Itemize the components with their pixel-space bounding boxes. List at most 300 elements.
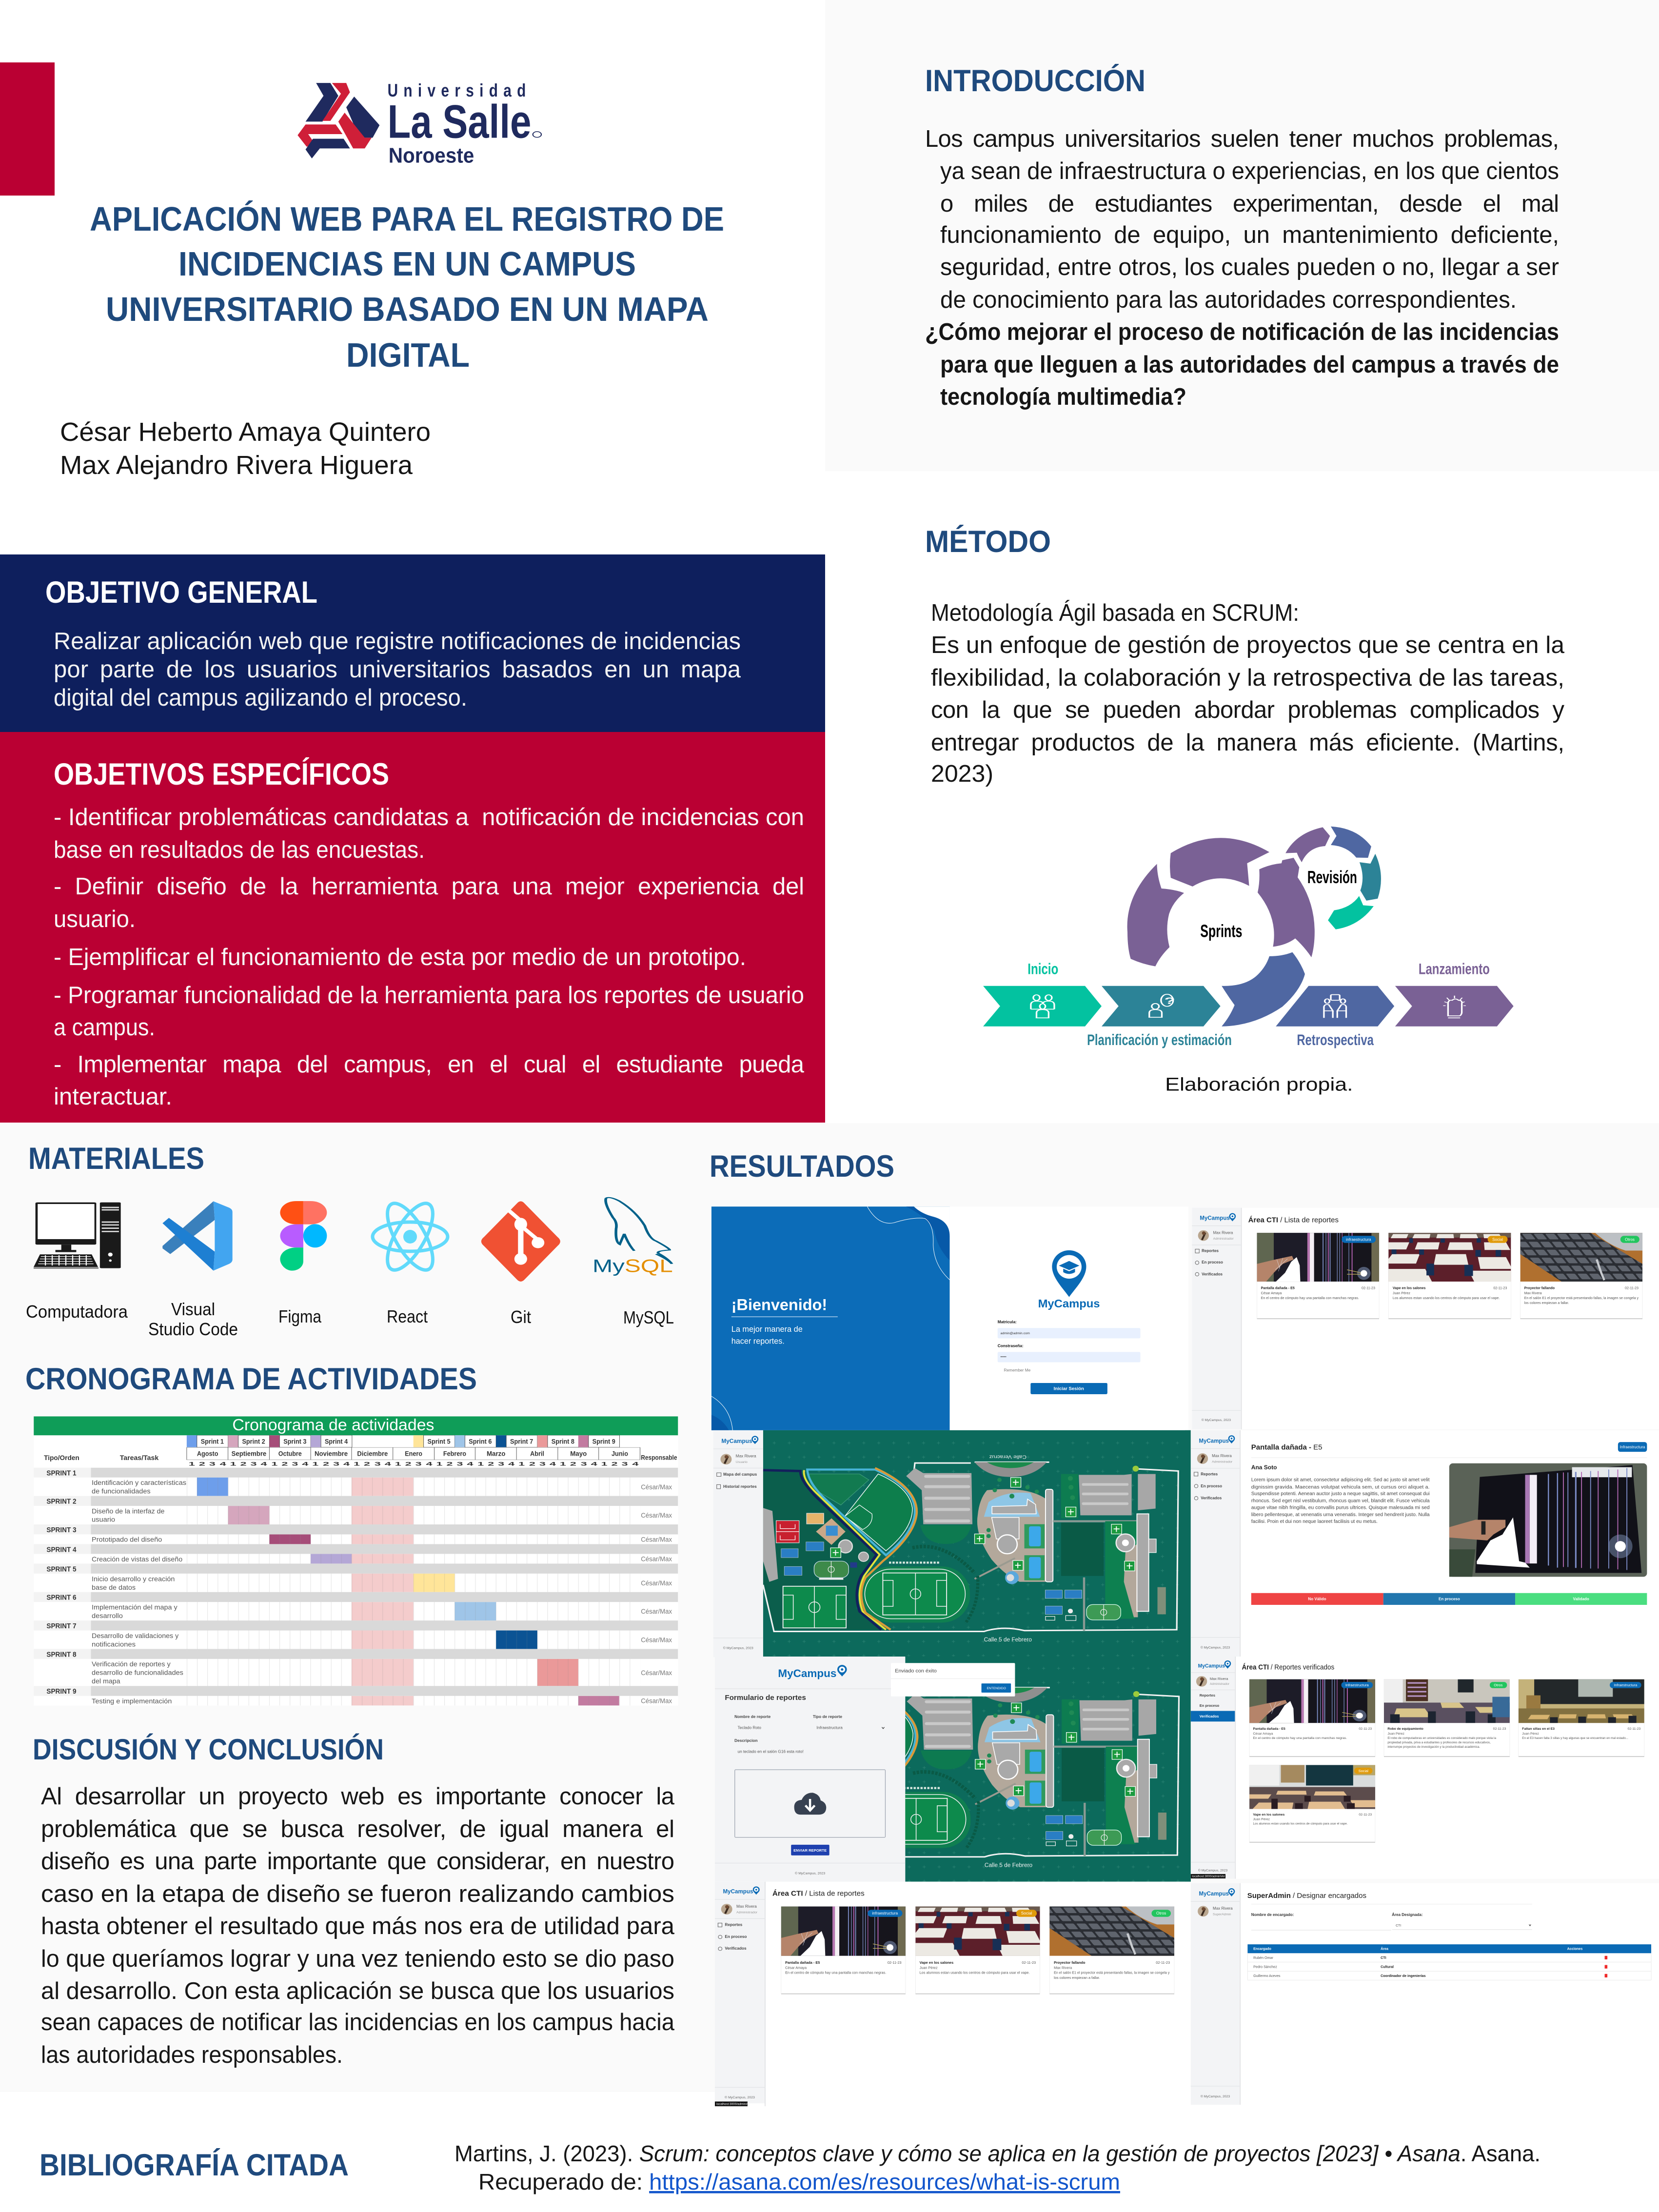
diagram: SCRUM process: Lanzamiento bbox=[1419, 960, 1490, 977]
text: introduccion: funcionamiento de equipo, un mantenimiento deficiente, bbox=[940, 222, 1559, 248]
screenshot: login: Matricula: bbox=[998, 1320, 1017, 1324]
card: pantalla dañada verificada: César Amaya bbox=[1253, 1732, 1273, 1736]
gantt sprint rows: SPRINT 6 bbox=[46, 1594, 77, 1601]
text: discusion y conclusion: problemática que se busca resolver, de igual manera el bbox=[41, 1816, 674, 1842]
admin list sidebar bbox=[715, 1882, 766, 2106]
card: robo de equipamiento: El robo de computadoras en universidades es considerado malo porque viola la bbox=[1387, 1737, 1496, 1740]
chart: gantt cronograma de actividades: Identificación y características bbox=[92, 1479, 186, 1487]
chart: gantt cronograma de actividades: desarrollo de funcionalidades bbox=[92, 1669, 183, 1677]
verified sidebar bbox=[1191, 1657, 1236, 1879]
card: proyector: los colores empiezan a fallar. bbox=[1524, 1302, 1569, 1305]
gantt tasks: desarrollo bbox=[92, 1612, 123, 1620]
detail sidebar: Verificados bbox=[1201, 1496, 1222, 1501]
text: introduccion: ¿Cómo mejorar el proceso de notificación de las incidencias bbox=[925, 319, 1559, 345]
labels: materiales: Computadora bbox=[26, 1302, 128, 1322]
screenshot: login: La mejor manera de bbox=[731, 1325, 803, 1334]
diagram: SCRUM process: Inicio bbox=[1027, 960, 1058, 977]
gantt legend: Sprint 5 bbox=[428, 1438, 451, 1445]
gantt column headers: Septiembre bbox=[232, 1450, 266, 1458]
text: objetivos especificos bbox=[54, 804, 805, 1110]
card: faltan sillas bbox=[1519, 1679, 1644, 1757]
text: objetivos especificos: - Ejemplificar el funcionamiento de esta por medio de un prototipo. bbox=[54, 944, 746, 970]
text: discusion y conclusion: Al desarrollar un proyecto web es importante conocer la bbox=[41, 1783, 675, 1810]
card: proyector admin: 02-11-23 bbox=[1156, 1961, 1170, 1965]
chart: gantt cronograma de actividades: César/Max bbox=[641, 1608, 672, 1615]
card: robo de equipamiento: propiedad privada, priva a estudiantes y profesores de recursos educativos, bbox=[1387, 1741, 1491, 1744]
gantt tasks: Inicio desarrollo y creación bbox=[92, 1575, 175, 1583]
chart: gantt cronograma de actividades: César/Max bbox=[641, 1669, 672, 1677]
card: pantalla dañada verificada: Pantalla dañada - E5 bbox=[1253, 1727, 1285, 1731]
heading: objetivos especificos: OBJETIVOS ESPECÍFICOS bbox=[54, 757, 389, 791]
gantt tasks: notificaciones bbox=[92, 1640, 136, 1648]
superadmin sidebar: © MyCampus, 2023 bbox=[1201, 2094, 1230, 2098]
gantt column headers: Febrero bbox=[443, 1450, 466, 1458]
card: pantalla dañada admin: César Amaya bbox=[785, 1966, 807, 1970]
designation form: Nombre de encargado: bbox=[1251, 1913, 1294, 1917]
card: vape admin: Social bbox=[1021, 1911, 1032, 1916]
gantt title bar: Cronograma de actividades bbox=[232, 1416, 434, 1434]
detail description: rhoncus. Sed eget nisl vestibulum, rhoncus quam vel, blandit elit. Fusce vehicula bbox=[1251, 1499, 1430, 1504]
map sidebar bbox=[713, 1430, 763, 1657]
gantt vacation block bbox=[352, 1478, 414, 1705]
text: objetivo general bbox=[54, 628, 741, 711]
gantt legend bbox=[187, 1435, 620, 1447]
report form: Tipo de reporte bbox=[813, 1715, 843, 1719]
verified sidebar: © MyCampus, 2023 bbox=[1198, 1869, 1227, 1872]
card: robo de equipamiento bbox=[1384, 1679, 1510, 1757]
screenshot: login: admin@admin.com bbox=[1000, 1332, 1030, 1335]
authors bbox=[60, 417, 431, 480]
text: metodo: flexibilidad, la colaboración y la retrospectiva de las tareas, bbox=[931, 665, 1564, 691]
card: vape admin: Los alumnos estan usando los centros de cómputo para usar el vape. bbox=[920, 1971, 1030, 1975]
success dialog bbox=[891, 1663, 1015, 1697]
big ring: sprints bbox=[1127, 838, 1315, 1027]
verified sidebar: MyCampus bbox=[1198, 1663, 1225, 1669]
gantt sprint rows: SPRINT 3 bbox=[46, 1526, 77, 1534]
gantt tasks: Desarrollo de validaciones y bbox=[92, 1632, 178, 1640]
map sidebar: Usuario bbox=[736, 1461, 748, 1464]
report form: Formulario de reportes bbox=[725, 1694, 806, 1702]
card: proyector bbox=[1521, 1233, 1642, 1319]
labels: materiales: Figma bbox=[278, 1306, 322, 1326]
detail description: dignissim gravida. Maecenas volutpat vehicula sem, ut cursus orci aliquet a. bbox=[1251, 1484, 1430, 1490]
logo: Universidad La Salle Noroeste: La Salle bbox=[388, 95, 531, 148]
diagram: SCRUM process bbox=[983, 827, 1514, 1095]
gantt legend: Sprint 2 bbox=[242, 1438, 265, 1445]
card: pantalla dañada admin bbox=[781, 1907, 906, 1995]
detail status buttons bbox=[1251, 1593, 1647, 1605]
chart: gantt cronograma de actividades: César/Max bbox=[641, 1580, 672, 1587]
card: pantalla dañada verificada: En el centro de cómputo hay una pantalla con manchas negras. bbox=[1253, 1737, 1347, 1740]
card: proyector admin: Proyector fallando bbox=[1054, 1961, 1086, 1965]
screenshot: verified reports bbox=[1185, 1657, 1659, 1882]
gantt bars bbox=[197, 1478, 619, 1705]
card: pantalla dañada verificada bbox=[1249, 1679, 1375, 1757]
gantt column headers: Abril bbox=[530, 1450, 544, 1458]
map sidebar: © MyCampus, 2023 bbox=[723, 1646, 753, 1650]
gantt column headers bbox=[44, 1447, 677, 1467]
card: faltan sillas: Juan Pérez bbox=[1522, 1732, 1539, 1736]
detail sidebar: © MyCampus, 2023 bbox=[1201, 1646, 1230, 1650]
panel: objetivos especificos bbox=[0, 732, 825, 1123]
text: discusion y conclusion: diseño es una parte importante que considerar, en nuestro bbox=[41, 1848, 674, 1875]
text: metodo bbox=[931, 600, 1565, 787]
card: vape verificado bbox=[1249, 1765, 1375, 1843]
arrow: planificacion bbox=[1102, 986, 1221, 1027]
detail description: facilisi. Proin et dui non neque laoreet facilisis ut eu metus. bbox=[1251, 1519, 1378, 1524]
text: objetivo general: por parte de los usuarios universitarios basados en un mapa bbox=[54, 656, 741, 683]
report form: ENVIAR REPORTE bbox=[793, 1848, 827, 1853]
decorative red tab bbox=[0, 62, 55, 196]
detail sidebar: MyCampus bbox=[1199, 1437, 1229, 1444]
screenshot: superadmin: SuperAdmin / Designar encargados bbox=[1247, 1892, 1366, 1900]
text: objetivo general: digital del campus agilizando el proceso. bbox=[54, 685, 467, 711]
text: discusion y conclusion: sean capaces de notificar las incidencias en los campus hacia bbox=[41, 2009, 675, 2035]
detail description: libero pellentesque, at venenatis urna venenatis. Integer sed hendrerit justo. Nulla bbox=[1251, 1512, 1430, 1518]
gantt column headers: 12341234123412341234123412341234123412341234 bbox=[189, 1461, 639, 1467]
chart: gantt cronograma de actividades: César/Max bbox=[641, 1697, 672, 1704]
card: vape: 02-11-23 bbox=[1493, 1286, 1507, 1290]
card: proyector admin: los colores empiezan a fallar. bbox=[1054, 1976, 1100, 1980]
gantt tasks: Diseño de la interfaz de bbox=[92, 1507, 164, 1515]
gantt legend: Sprint 6 bbox=[469, 1438, 492, 1445]
card: vape: Juan Pérez bbox=[1393, 1292, 1410, 1295]
card: pantalla dañada verificada: Infraestructura bbox=[1345, 1683, 1369, 1687]
gantt sprint rows: SPRINT 5 bbox=[46, 1565, 77, 1573]
map labels bbox=[984, 1454, 1032, 1643]
text: objetivos especificos: usuario. bbox=[54, 906, 136, 932]
report form: un teclado en el salón G16 esta roto! bbox=[738, 1750, 804, 1754]
sidebar: Reportes bbox=[1202, 1249, 1219, 1253]
text: Responsable bbox=[641, 1454, 677, 1461]
detail status buttons: Validado bbox=[1573, 1597, 1589, 1601]
chart: gantt cronograma de actividades: César/Max bbox=[641, 1556, 672, 1562]
designation form: Área Designada: bbox=[1392, 1913, 1423, 1917]
detail sidebar: Reportes bbox=[1201, 1472, 1218, 1477]
gantt tasks: Testing e implementación bbox=[92, 1697, 172, 1705]
admin list sidebar: localhost:3000/admin# bbox=[716, 2103, 748, 2106]
chart: gantt cronograma de actividades: Creación de vistas del diseño bbox=[92, 1555, 182, 1563]
text: objetivos especificos: interactuar. bbox=[54, 1084, 172, 1110]
gantt legend: Sprint 9 bbox=[592, 1438, 615, 1445]
text: objetivos especificos: - Definir diseño de la herramienta para una mejor experiencia del bbox=[54, 873, 804, 900]
heading: objetivo general: OBJETIVO GENERAL bbox=[45, 575, 317, 610]
heading: introduccion: INTRODUCCIÓN bbox=[925, 64, 1146, 98]
text: metodo: entregar productos de la manera más eficiente. (Martins, bbox=[931, 730, 1564, 756]
sidebar: Verificados bbox=[1202, 1272, 1223, 1276]
heading: bibliografia citada: BIBLIOGRAFÍA CITADA bbox=[40, 2148, 349, 2182]
report form: Infraestructura bbox=[817, 1726, 843, 1730]
screenshot: map with success dialog bbox=[715, 1656, 1191, 1882]
sidebar: © MyCampus, 2023 bbox=[1202, 1418, 1231, 1422]
table: encargados: Área bbox=[1381, 1947, 1388, 1951]
gantt sprint rows: SPRINT 4 bbox=[46, 1546, 77, 1554]
report form: Descripcion bbox=[734, 1738, 758, 1743]
intro panel background bbox=[825, 0, 1659, 471]
text: discusion y conclusion: hasta obtener el resultado que más nos era de utilidad para bbox=[41, 1913, 675, 1939]
text: discusion y conclusion: lo que queríamos lograr y una vez teniendo esto se dio paso bbox=[41, 1946, 674, 1972]
card: pantalla dañada admin: 02-11-23 bbox=[888, 1961, 902, 1965]
card: vape admin: Juan Pérez bbox=[920, 1966, 938, 1970]
authors: César Heberto Amaya Quintero bbox=[60, 417, 431, 447]
chart: gantt cronograma de actividades: César/Max bbox=[641, 1536, 672, 1543]
admin list sidebar: En proceso bbox=[725, 1935, 747, 1939]
text: objetivos especificos: - Programar funcionalidad de la herramienta para los reportes de usuario bbox=[54, 982, 804, 1008]
gantt tasks: base de datos bbox=[92, 1583, 136, 1591]
screenshot: login bbox=[711, 1206, 1188, 1430]
gantt legend: Sprint 7 bbox=[510, 1438, 533, 1445]
text: introduccion: para que lleguen a las autoridades del campus a través de bbox=[940, 352, 1559, 378]
text: metodo: Metodología Ágil basada en SCRUM: bbox=[931, 600, 1299, 626]
admin list sidebar: © MyCampus, 2023 bbox=[725, 2095, 755, 2099]
map sidebar: MyCampus bbox=[721, 1438, 752, 1444]
gantt legend: Sprint 4 bbox=[325, 1438, 348, 1445]
verified sidebar: Max Rivera bbox=[1210, 1677, 1228, 1681]
gantt column headers: Tipo/Orden bbox=[44, 1454, 79, 1462]
admin list sidebar: Reportes bbox=[725, 1923, 743, 1927]
admin list sidebar: Administrador bbox=[736, 1911, 758, 1914]
gantt sprint rows bbox=[34, 1468, 678, 1696]
labels: materiales: Studio Code bbox=[148, 1319, 238, 1339]
screenshot: report detail: Pantalla dañada - E5 bbox=[1251, 1443, 1322, 1451]
logo: Universidad La Salle Noroeste: Noroeste bbox=[389, 143, 474, 167]
title: APLICACIÓN WEB PARA EL REGISTRO DE bbox=[90, 200, 724, 238]
screenshot: campus map bbox=[713, 1430, 1191, 1657]
card: proyector: Max Rivera bbox=[1524, 1292, 1542, 1295]
report form: Nombre de reporte bbox=[734, 1715, 771, 1719]
map sidebar: Historial reportes bbox=[723, 1484, 757, 1489]
screenshot: login: hacer reportes. bbox=[731, 1337, 785, 1345]
detail sidebar bbox=[1185, 1430, 1241, 1657]
verified sidebar: Verificados bbox=[1200, 1714, 1219, 1718]
screenshot: report detail: Infraestructura bbox=[1620, 1445, 1645, 1449]
text: discusion y conclusion: caso en la etapa de diseño se fueron realizando cambios bbox=[41, 1881, 674, 1907]
logo: Universidad La Salle Noroeste: Universidad bbox=[388, 81, 526, 101]
screenshot: login: Iniciar Sesión bbox=[1054, 1386, 1084, 1391]
card: vape bbox=[1384, 1233, 1512, 1319]
text: introduccion: tecnología multimedia? bbox=[940, 384, 1186, 410]
table: encargados: Pedro Sánchez bbox=[1253, 1966, 1277, 1969]
diagram: SCRUM process: Sprints bbox=[1200, 921, 1242, 941]
detail description: Lorem ipsum dolor sit amet, consectetur adipiscing elit. Sed ac justo sit amet velit bbox=[1251, 1478, 1430, 1483]
text: introduccion: o miles de estudiantes experimentan, desde el mal bbox=[940, 191, 1559, 217]
gantt column headers: Octubre bbox=[278, 1450, 302, 1458]
card: vape: Vape en los salones bbox=[1393, 1286, 1426, 1290]
superadmin sidebar: Max Rivera bbox=[1213, 1906, 1233, 1911]
gantt title bar bbox=[34, 1416, 678, 1435]
text: introduccion: seguridad, entre otros, los cuales pueden o no, llegar a ser bbox=[940, 254, 1559, 280]
second map bbox=[905, 1657, 1191, 1882]
designation form: CTI bbox=[1396, 1924, 1401, 1928]
gantt column headers: Tareas/Task bbox=[120, 1454, 158, 1462]
superadmin sidebar: SuperAdmin bbox=[1213, 1913, 1231, 1916]
text: discusion y conclusion bbox=[41, 1783, 675, 2068]
detail status buttons: En proceso bbox=[1439, 1597, 1460, 1601]
superadmin sidebar bbox=[1191, 1883, 1241, 2105]
table: encargados: Encargado bbox=[1253, 1948, 1272, 1951]
screenshot: login: Constraseña: bbox=[998, 1344, 1024, 1348]
table: encargados: Guillermo Aceves bbox=[1253, 1975, 1281, 1978]
diagram: SCRUM process: Retrospectiva bbox=[1297, 1031, 1374, 1048]
card: pantalla dañada: 02-11-23 bbox=[1362, 1286, 1375, 1290]
lower section background bbox=[0, 1123, 1659, 2092]
screenshot: login: ••••• bbox=[1000, 1356, 1007, 1359]
map labels: Calle Veracruz bbox=[989, 1454, 1027, 1460]
gantt column headers: Marzo bbox=[487, 1450, 505, 1458]
card: faltan sillas: 02-11-23 bbox=[1628, 1727, 1641, 1731]
small ring: revision bbox=[1285, 827, 1381, 929]
text: introduccion: de conocimiento para las autoridades correspondientes. bbox=[940, 287, 1517, 313]
card: pantalla dañada: César Amaya bbox=[1261, 1292, 1282, 1295]
detail sidebar: Administrador bbox=[1212, 1461, 1233, 1464]
gantt responsible column bbox=[641, 1483, 672, 1704]
card: proyector admin: Max Rivera bbox=[1054, 1966, 1072, 1970]
screenshot: report list: Área CTI / Lista de reportes bbox=[1248, 1216, 1339, 1224]
chart: gantt cronograma de actividades bbox=[34, 1416, 678, 1705]
caption: Elaboración propia. bbox=[1165, 1074, 1353, 1095]
icon: visual studio code bbox=[162, 1201, 233, 1271]
table: encargados: Cultural bbox=[1381, 1966, 1394, 1969]
card: pantalla dañada admin: infraestructura bbox=[872, 1911, 898, 1916]
diagram: SCRUM process: Planificación y estimación bbox=[1087, 1031, 1232, 1048]
card: proyector: Proyector fallando bbox=[1524, 1286, 1555, 1290]
screenshot: login: ¡Bienvenido! bbox=[731, 1296, 827, 1314]
heading: cronograma: CRONOGRAMA DE ACTIVIDADES bbox=[25, 1362, 477, 1396]
arrow: planificacion: ? bbox=[1164, 996, 1175, 1006]
authors: Max Alejandro Rivera Higuera bbox=[60, 451, 413, 480]
verified sidebar: Reportes bbox=[1200, 1693, 1215, 1698]
sidebar: Administrador bbox=[1213, 1237, 1234, 1241]
card: robo de equipamiento: Robo de equipamiento bbox=[1387, 1727, 1423, 1731]
gantt sprint rows: SPRINT 7 bbox=[46, 1622, 77, 1630]
title: DIGITAL bbox=[346, 336, 470, 374]
gantt tasks bbox=[92, 1479, 186, 1705]
card: robo de equipamiento: Otros bbox=[1494, 1683, 1503, 1687]
verified sidebar: Administrador bbox=[1210, 1682, 1230, 1686]
screenshot: report detail bbox=[1185, 1430, 1659, 1657]
card: pantalla dañada: Pantalla dañada - E5 bbox=[1261, 1286, 1295, 1290]
map labels: Calle 5 de Febrero bbox=[984, 1636, 1032, 1643]
designation form bbox=[1251, 1913, 1532, 1931]
text: objetivos especificos: a campus. bbox=[54, 1014, 155, 1041]
report form bbox=[715, 1657, 905, 1882]
screenshot: verified reports: Área CTI / Reportes verificados bbox=[1242, 1663, 1335, 1672]
admin list sidebar: MyCampus bbox=[723, 1888, 753, 1895]
screenshot: admin report list: Área CTI / Lista de reportes bbox=[772, 1890, 865, 1898]
admin list sidebar: Max Rivera bbox=[736, 1904, 757, 1909]
title bbox=[90, 200, 724, 374]
logo: Universidad La Salle Noroeste bbox=[297, 81, 541, 167]
card: pantalla dañada: infraestructura bbox=[1346, 1238, 1371, 1242]
gantt tasks: del mapa bbox=[92, 1677, 120, 1685]
gantt sprint rows: SPRINT 2 bbox=[46, 1498, 77, 1505]
text: introduccion: Los campus universitarios suelen tener muchos problemas, bbox=[925, 126, 1559, 152]
card: vape verificado: Los alumnos estan usando los centros de cómputo para usar el vape. bbox=[1253, 1822, 1348, 1826]
gantt tasks: Verificación de reportes y bbox=[92, 1660, 171, 1668]
heading: materiales: MATERIALES bbox=[28, 1142, 204, 1176]
text: bibliografia: Martins, J. (2023). Scrum: conceptos clave y cómo se aplica en la gestión de proyectos [2023] • Asana. Asana. bbox=[454, 2141, 1540, 2166]
icon: figma bbox=[280, 1201, 327, 1271]
chart: gantt cronograma de actividades: César/Max bbox=[641, 1483, 672, 1491]
card: faltan sillas: Infraestructura bbox=[1614, 1683, 1638, 1687]
table: encargados: Acciones bbox=[1567, 1948, 1582, 1951]
card: robo de equipamiento: Juan Pérez bbox=[1387, 1732, 1404, 1736]
table: encargados bbox=[1247, 1944, 1651, 1980]
icon: computer bbox=[34, 1203, 121, 1269]
card: vape admin bbox=[911, 1907, 1041, 1995]
card: vape verificado: Juan Pérez bbox=[1253, 1818, 1270, 1821]
labels: materiales: React bbox=[387, 1306, 428, 1326]
detail description: Suspendisse potenti. Aenean auctor justo a neque sagittis, sit amet consequat dui bbox=[1251, 1491, 1430, 1497]
title: UNIVERSITARIO BASADO EN UN MAPA bbox=[106, 290, 709, 328]
verified sidebar: En proceso bbox=[1200, 1703, 1220, 1708]
gantt tasks: usuario bbox=[92, 1516, 115, 1523]
card: faltan sillas: En el E3 hacen falta 3 sillas y hay algunas que se encuentran en mal estado... bbox=[1522, 1737, 1628, 1740]
second map label: Calle 5 de Febrero bbox=[985, 1862, 1033, 1868]
text: introduccion bbox=[925, 126, 1559, 410]
icons: materiales bbox=[34, 1198, 673, 1282]
heading: metodo: MÉTODO bbox=[925, 525, 1051, 559]
screenshot: login: Remember Me bbox=[1004, 1368, 1031, 1372]
screenshot: superadmin bbox=[1191, 1883, 1659, 2105]
gantt tasks: Implementación del mapa y bbox=[92, 1603, 178, 1611]
detail description bbox=[1251, 1478, 1430, 1524]
table: encargados: Coordinador de ingenierías bbox=[1381, 1975, 1426, 1978]
report form: © MyCampus, 2023 bbox=[795, 1872, 825, 1875]
table: encargados: Rubén Omar bbox=[1253, 1956, 1273, 1960]
verified sidebar: localhost:3000/adminVer bbox=[1192, 1875, 1225, 1878]
table: encargados: CTI bbox=[1381, 1956, 1386, 1960]
card: proyector: En el salón E1 el proyector está presentando fallas, la imagen se congela y bbox=[1524, 1297, 1639, 1300]
card: pantalla dañada bbox=[1257, 1233, 1379, 1319]
gantt sprint rows: SPRINT 1 bbox=[46, 1469, 77, 1477]
map sidebar: Max Rivera bbox=[736, 1454, 756, 1459]
card: pantalla dañada admin: En el centro de cómputo hay una pantalla con manchas negras. bbox=[785, 1971, 886, 1975]
card: proyector admin: Otros bbox=[1156, 1911, 1166, 1916]
text: metodo: 2023) bbox=[931, 761, 993, 787]
card: pantalla dañada admin: Pantalla dañada - E5 bbox=[785, 1961, 820, 1965]
card: vape verificado: Social bbox=[1359, 1769, 1368, 1773]
gantt column headers: Enero bbox=[405, 1450, 422, 1458]
screenshot: admin report list bbox=[715, 1882, 1191, 2106]
card: proyector: 02-11-23 bbox=[1625, 1286, 1639, 1290]
gantt legend: Sprint 1 bbox=[201, 1438, 224, 1445]
card: proyector: Otros bbox=[1625, 1238, 1635, 1242]
heading: discusion y conclusion: DISCUSIÓN Y CONCLUSIÓN bbox=[33, 1733, 384, 1766]
diagram: SCRUM process: Revisión bbox=[1307, 868, 1357, 887]
screenshot: report detail: Ana Soto bbox=[1251, 1464, 1277, 1471]
text: metodo: con la que se pueden abordar problemas complicados y bbox=[931, 697, 1564, 723]
text: discusion y conclusion: al desarrollo. Con esta aplicación se busca que los usuarios bbox=[41, 1978, 674, 2004]
card: proyector admin: En el salón E1 el proyector está presentando fallas, la imagen se congela y bbox=[1054, 1971, 1170, 1975]
gantt column headers: Noviembre bbox=[315, 1450, 348, 1458]
gantt sprint rows: SPRINT 8 bbox=[46, 1651, 77, 1659]
arrow: lanzamiento bbox=[1395, 986, 1514, 1027]
labels: materiales: Git bbox=[511, 1307, 531, 1327]
sidebar: Max Rivera bbox=[1213, 1231, 1233, 1235]
text: introduccion: ya sean de infraestructura o experiencias, en los que cientos bbox=[940, 158, 1559, 184]
detail sidebar: En proceso bbox=[1201, 1484, 1222, 1488]
icon: git bbox=[481, 1201, 560, 1282]
arrow: inicio bbox=[983, 986, 1102, 1027]
arrow: retrospectiva bbox=[1276, 986, 1394, 1027]
detail sidebar: Max Rivera bbox=[1212, 1454, 1232, 1458]
text: bibliografia: Recuperado de: https://asana.com/es/resources/what-is-scrum bbox=[478, 2169, 1120, 2194]
report form: Teclado Roto bbox=[738, 1726, 761, 1730]
screenshot: report list bbox=[1192, 1208, 1659, 1429]
text: discusion y conclusion: las autoridades responsables. bbox=[41, 2042, 343, 2068]
admin list sidebar: Verificados bbox=[725, 1946, 747, 1951]
